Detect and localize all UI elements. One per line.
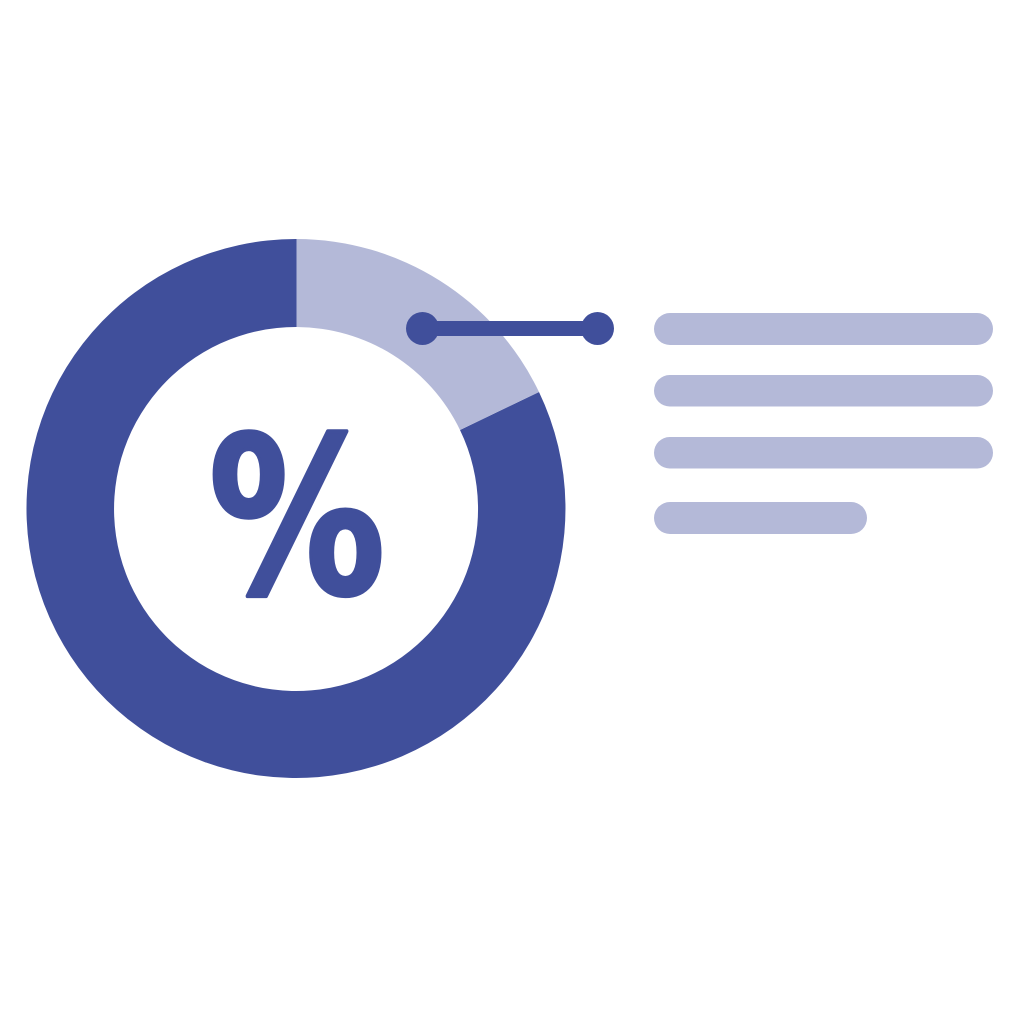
- donut chart: [26, 239, 565, 778]
- percent symbol: %: [209, 391, 385, 645]
- text placeholder bars: [654, 313, 993, 534]
- donut segment: highlighted light: [296, 239, 539, 430]
- donut segment: major dark: [26, 239, 565, 778]
- connector line with end dots: [406, 312, 614, 345]
